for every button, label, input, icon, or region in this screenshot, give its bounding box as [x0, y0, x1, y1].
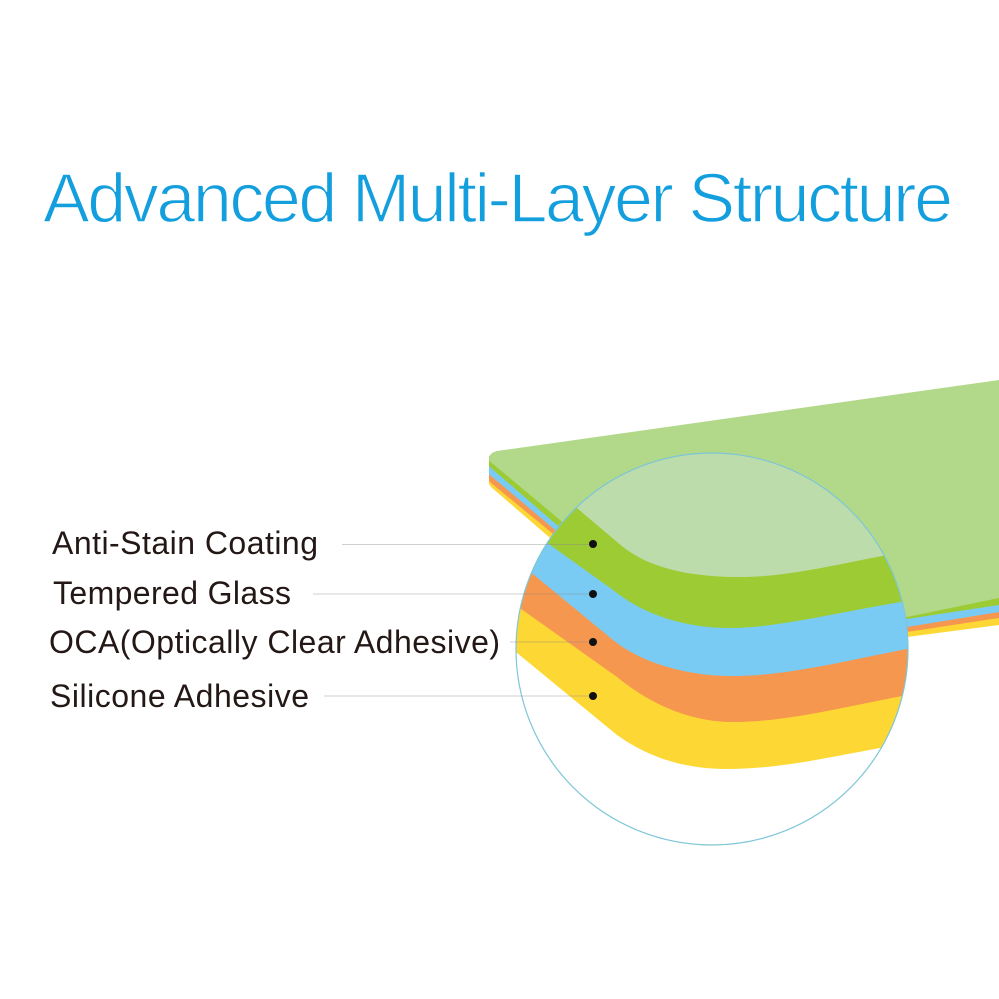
label: Anti-Stain Coating: Anti-Stain Coating — [52, 525, 318, 561]
layer: OCA — [520, 574, 908, 722]
screen protector plate — [489, 380, 999, 637]
label: Silicone Adhesive — [50, 678, 597, 714]
label: OCA (Optically Clear Adhesive): OCA(Optically Clear Adhesive) — [49, 624, 500, 660]
top surface magnified — [576, 454, 884, 577]
magnified circle — [515, 452, 909, 846]
layer: silicone adhesive — [516, 608, 902, 769]
label: Tempered Glass — [53, 575, 597, 611]
layer: tempered glass — [532, 543, 908, 676]
label: Anti-Stain Coating — [52, 525, 597, 561]
layer: anti-stain coating — [548, 508, 902, 628]
title: Advanced Multi-Layer Structure — [43, 159, 953, 237]
label: Tempered Glass: Tempered Glass — [53, 575, 291, 611]
label: Silicone Adhesive: Silicone Adhesive — [50, 678, 309, 714]
